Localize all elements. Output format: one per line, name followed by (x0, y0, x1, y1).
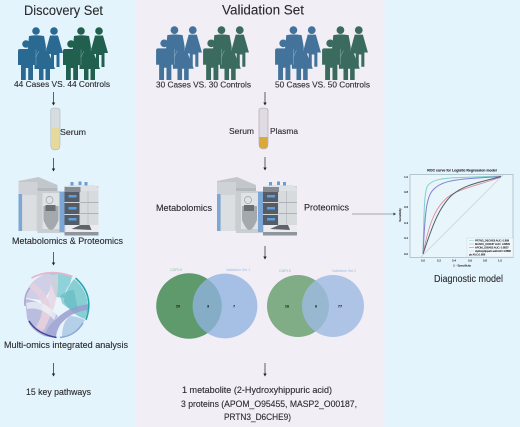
y axis ticks (404, 175, 408, 256)
chart: venn diagram, validation set 1: 3 (207, 304, 209, 308)
arrow (52, 158, 55, 172)
chart: ROC curve (398, 168, 513, 268)
y axis ticks: 0.0 (404, 252, 408, 256)
arrow (52, 92, 55, 106)
label: serum: Serum (229, 126, 254, 136)
icon: mass spectrometer and chromatography instrument (217, 177, 297, 236)
y axis ticks: 1.0 (404, 175, 408, 179)
label: proteomics: Proteomics (304, 202, 350, 212)
x axis ticks: 0.4 (452, 258, 456, 262)
text: final biomarkers: 1 metabolite (2-Hydroxyhippuric acid) (182, 385, 332, 395)
chart title: ROC curve for Logistic Regression model (427, 168, 497, 172)
icon: plasma tube (259, 108, 268, 149)
x axis ticks: 0.2 (437, 258, 441, 262)
chart: venn diagram, validation set 2: 16 (285, 304, 289, 308)
arrow (52, 363, 55, 376)
label: discovery cohort size: 44 Cases VS. 44 Controls (14, 79, 110, 89)
legend: pb AUC:0.989 (469, 252, 486, 256)
icon: cases family, cohort 1 (156, 26, 202, 80)
icon: cases family (18, 27, 63, 80)
chart: venn diagram, validation set 2: 77 (338, 304, 342, 308)
icon: controls family, cohort 1 (203, 26, 249, 80)
chart: venn diagram, validation set 2: Validation Set 2 (332, 269, 356, 273)
chart: venn diagram, validation set 1: Validation Set 1 (226, 268, 250, 272)
legend: MASP2_O00187 AUC: 0.8835 (475, 242, 510, 246)
chart: venn diagram, validation set 2: 6 (315, 304, 317, 308)
text: final biomarkers: PRTN3_D6CHE9) (224, 412, 291, 422)
x axis ticks: 0.6 (468, 258, 472, 262)
label: plasma: Plasma (270, 126, 298, 136)
y axis ticks: 0.4 (404, 221, 408, 225)
chart: chord diagram (25, 273, 89, 338)
y axis ticks: 0.8 (404, 190, 408, 194)
label: metabolomics: Metabolomics (156, 203, 213, 213)
arrow (263, 363, 267, 376)
arrow (52, 252, 55, 266)
chart: venn diagram, validation set 1: 20 (176, 304, 180, 308)
label: serum: Serum (60, 127, 86, 137)
label: cohort 2 size: 50 Cases VS. 50 Controls (275, 80, 370, 90)
label: 15 key pathways: 15 key pathways (26, 387, 92, 397)
chart: venn diagram, validation set 2 (267, 269, 364, 337)
x axis ticks: 1.0 (498, 258, 502, 262)
legend: PRTN3_D6CHE9 AUC: 0.899 (475, 238, 510, 242)
label: metabolomics and proteomics: Metabolomics & Proteomics (12, 236, 124, 246)
y axis ticks: 0.6 (404, 205, 408, 209)
arrow (263, 157, 267, 170)
heading: discovery set: Discovery Set (24, 3, 103, 18)
chart: venn diagram, validation set 1: 7 (233, 304, 235, 308)
heading: validation set: Validation Set (222, 2, 304, 18)
label: multi-omics integrated analysis: Multi-omics integrated analysis (4, 340, 129, 350)
arrow (263, 92, 267, 106)
x axis ticks: 0.8 (483, 258, 487, 262)
panel: validation set (136, 0, 384, 427)
legend (467, 238, 513, 257)
label: cohort 1 size: 30 Cases VS. 30 Controls (156, 80, 251, 90)
icon: mass spectrometer and chromatography instrument (18, 177, 98, 236)
text: final biomarkers: 3 proteins (APOM_O95455, MASP2_O00187, (181, 399, 357, 409)
x axis label: 1 - Specificity (453, 264, 471, 268)
chart: venn diagram, validation set 2: CGPLX (279, 269, 292, 273)
y axis label: Sensitivity (398, 208, 402, 222)
chart: venn diagram, validation set 1 (156, 268, 257, 339)
arrow: proteomics to diagnostic model (352, 212, 396, 216)
legend: APOM_O95455 AUC: 0.8837 (475, 246, 509, 250)
text: final biomarkers (181, 385, 357, 422)
panel: discovery set (0, 0, 136, 427)
icon: serum tube (51, 108, 60, 150)
legend: Hydroxyhippuric acid AUC: 0.8882 (475, 249, 512, 253)
x axis ticks: 0.0 (421, 258, 425, 262)
chart: venn diagram, validation set 1: CGPLX (170, 268, 183, 272)
icon: controls family, cohort 2 (322, 26, 368, 80)
icon: controls family (63, 27, 108, 80)
x axis ticks (421, 258, 502, 262)
label: diagnostic model: Diagnostic model (434, 273, 503, 285)
icon: cases family, cohort 2 (275, 26, 321, 80)
y axis ticks: 0.2 (404, 236, 408, 240)
arrow (263, 246, 267, 260)
